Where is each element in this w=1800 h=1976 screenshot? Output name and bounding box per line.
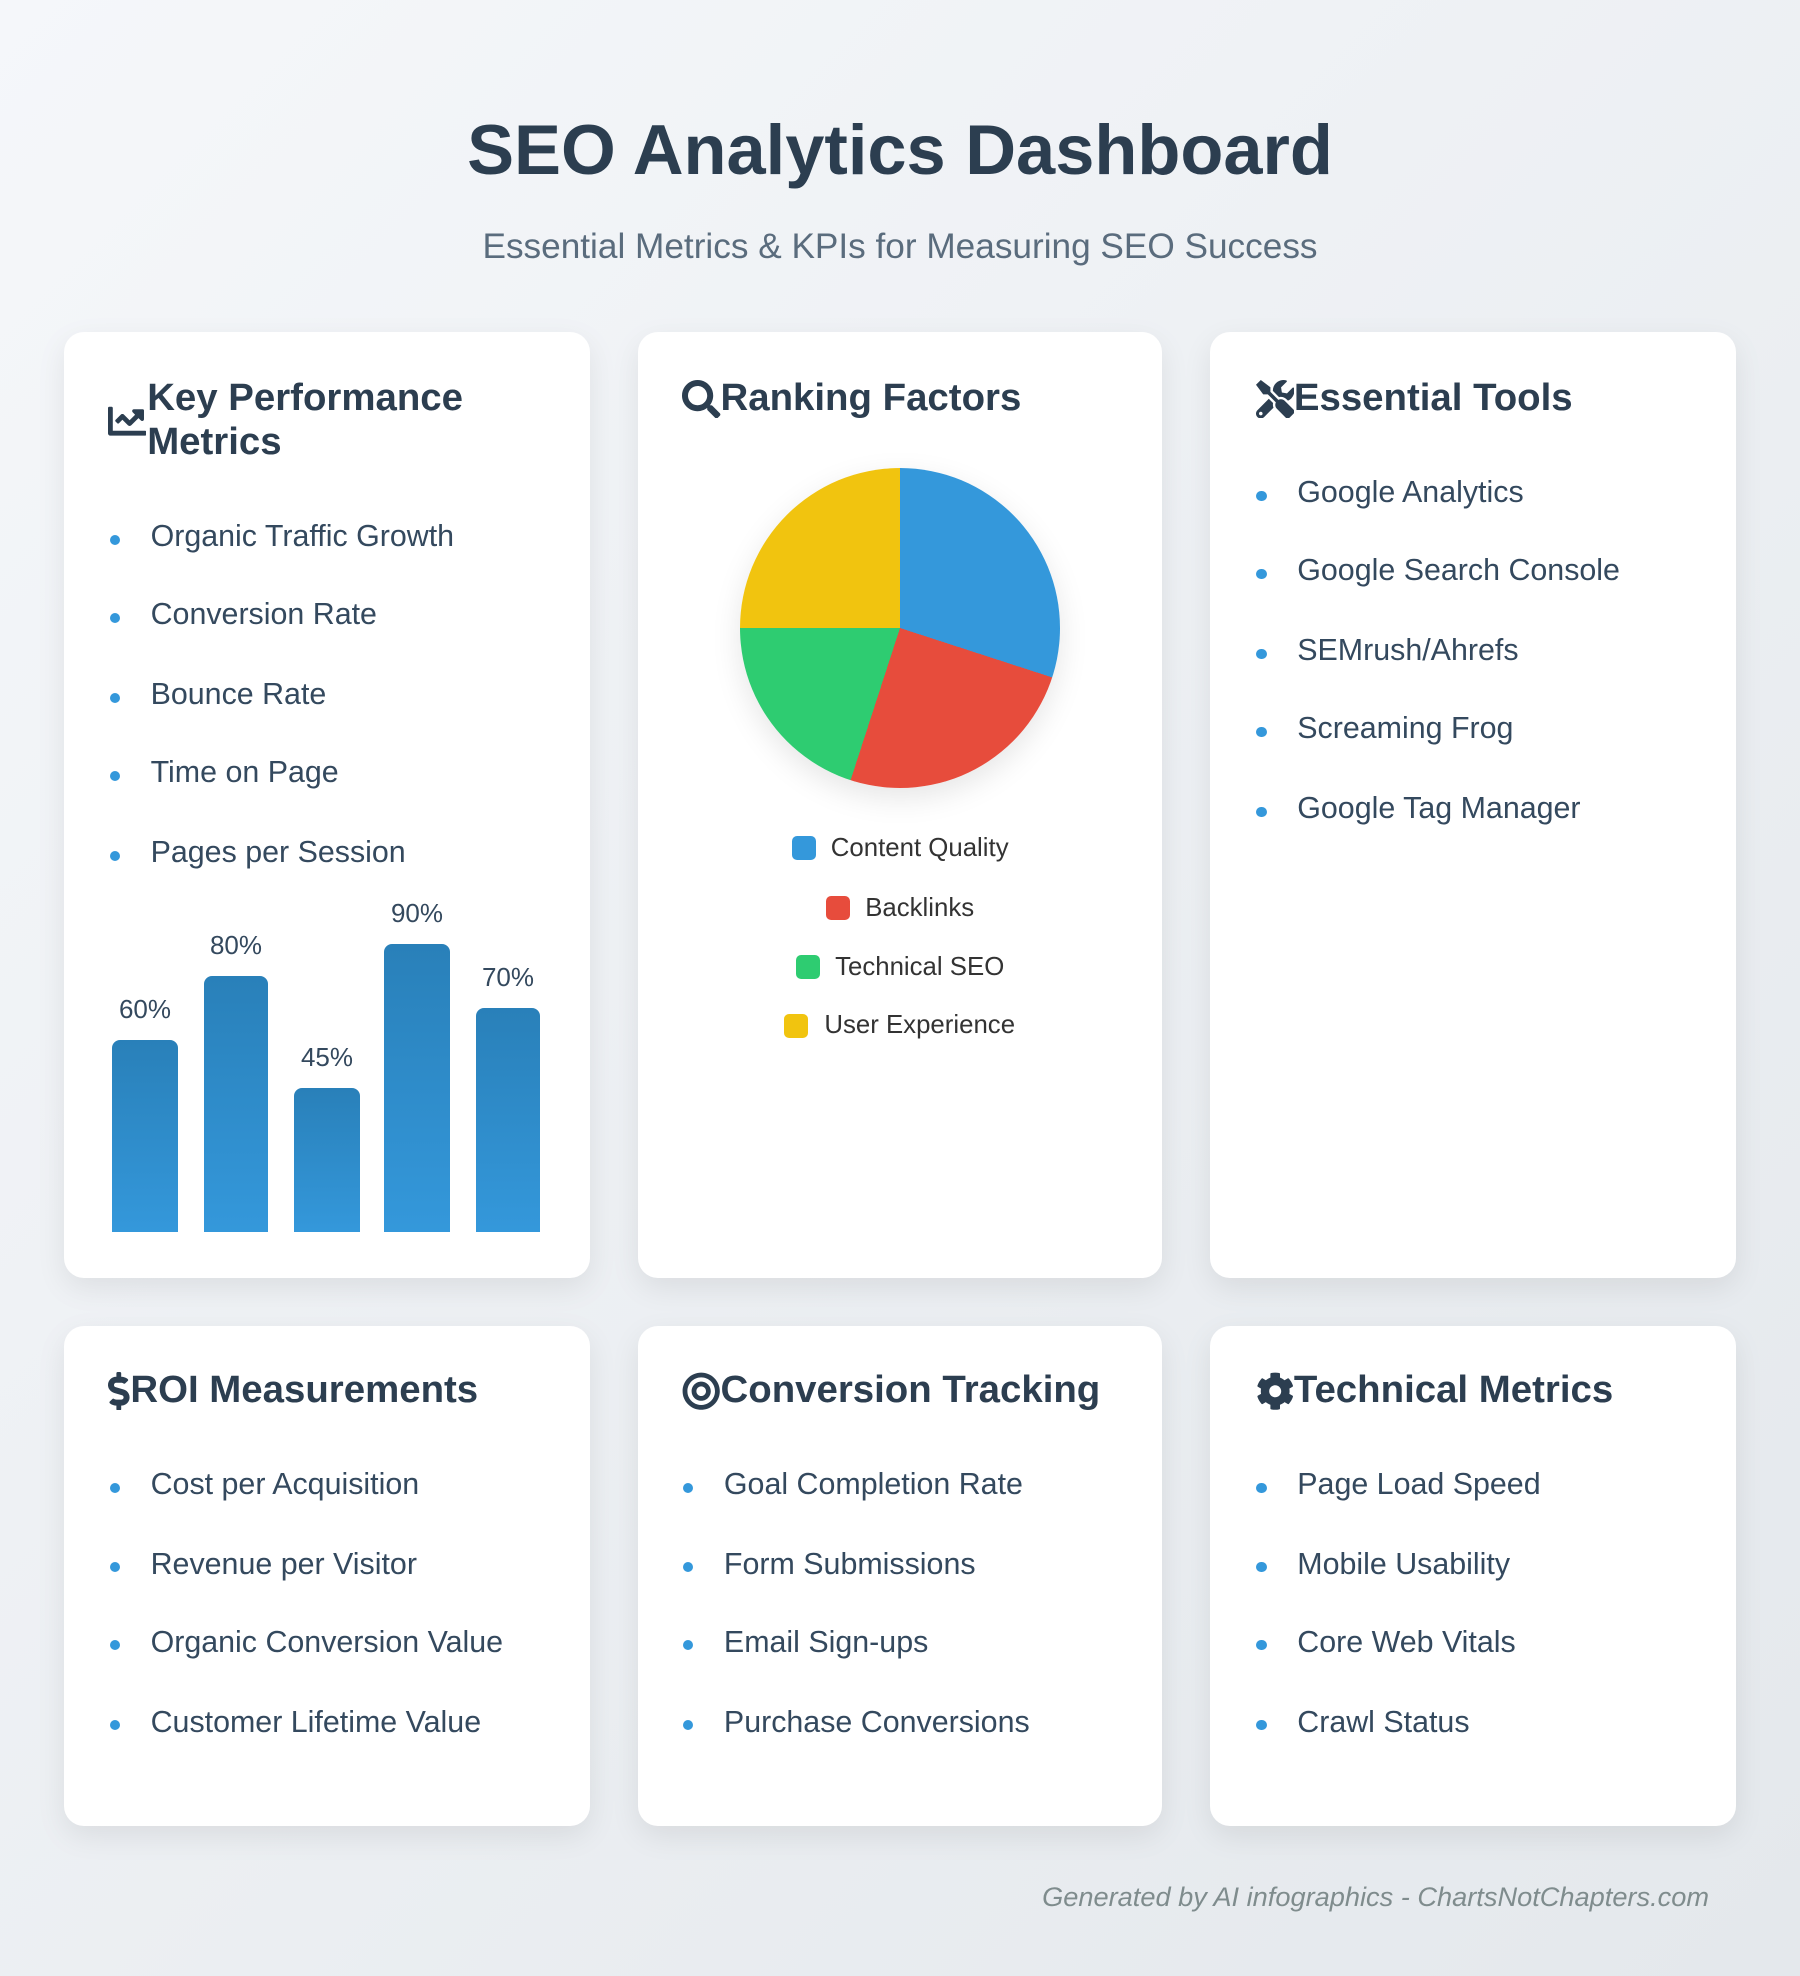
list: conversion items: Goal Completion Rate <box>724 1467 1023 1501</box>
heading: key performance metrics <box>108 376 463 463</box>
subtitle: Essential Metrics & KPIs for Measuring SEO Success <box>482 227 1318 266</box>
panel: essential tools <box>1210 332 1736 1278</box>
list: tools: Screaming Frog <box>1297 711 1513 745</box>
bar: 60% <box>112 994 178 1232</box>
title: SEO Analytics Dashboard <box>467 110 1333 189</box>
bar: 45% <box>294 1042 360 1232</box>
list: KPI items: Time on Page <box>151 755 339 789</box>
icon: line chart <box>108 406 146 436</box>
heading: essential tools: Essential Tools <box>1294 376 1573 419</box>
legend item: user experience: User Experience <box>824 1011 1015 1039</box>
list: technical items: Page Load Speed <box>1297 1467 1541 1501</box>
panel: key performance metrics <box>64 332 590 1278</box>
list: KPI items: Bounce Rate <box>151 677 326 711</box>
bar: 45%: 45% <box>301 1042 353 1072</box>
list: technical items: Core Web Vitals <box>1297 1625 1516 1659</box>
list: KPI items: Pages per Session <box>151 835 406 869</box>
icon: magnifying glass <box>682 380 720 418</box>
list: ROI items <box>110 1467 503 1739</box>
list: KPI items: Organic Traffic Growth <box>151 519 454 553</box>
heading: key performance metrics: Key Performance <box>147 376 463 419</box>
legend item: technical SEO: Technical SEO <box>835 953 1004 981</box>
footer credit: Generated by AI infographics - ChartsNotChapters.com <box>1042 1881 1709 1912</box>
bar: 70%: 70% <box>482 962 534 992</box>
list: KPI items: Conversion Rate <box>151 597 377 631</box>
bar: 80% <box>204 930 268 1232</box>
list: tools: SEMrush/Ahrefs <box>1297 633 1519 667</box>
list: ROI items: Revenue per Visitor <box>151 1547 417 1581</box>
panel: conversion tracking <box>638 1326 1162 1826</box>
bar: 90% <box>384 898 450 1232</box>
icon: tools <box>1256 380 1294 418</box>
list: KPI items <box>110 519 454 869</box>
bar chart <box>112 898 540 1232</box>
legend <box>784 834 1015 1039</box>
heading: conversion tracking: Conversion Tracking <box>721 1368 1100 1411</box>
legend item: backlinks: Backlinks <box>865 894 974 922</box>
list: conversion items: Email Sign-ups <box>724 1625 928 1659</box>
list: ROI items: Organic Conversion Value <box>151 1625 503 1659</box>
pie chart <box>740 468 1060 788</box>
list: tools: Google Analytics <box>1297 475 1524 509</box>
panel: technical metrics <box>1210 1326 1736 1826</box>
list: ROI items: Cost per Acquisition <box>151 1467 419 1501</box>
list: technical items <box>1256 1467 1541 1739</box>
heading: technical metrics: Technical Metrics <box>1294 1368 1613 1411</box>
list: conversion items: Purchase Conversions <box>724 1705 1030 1739</box>
bar: 90%: 90% <box>391 898 443 928</box>
list: tools: Google Tag Manager <box>1297 791 1581 825</box>
list: conversion items <box>683 1467 1030 1739</box>
bar: 60%: 60% <box>119 994 171 1024</box>
bar: 80%: 80% <box>210 930 262 960</box>
panel: ROI measurements <box>64 1326 590 1826</box>
heading: key performance metrics: Metrics <box>147 420 282 463</box>
heading: ROI measurements: ROI Measurements <box>130 1368 478 1411</box>
list: conversion items: Form Submissions <box>724 1547 976 1581</box>
bar: 70% <box>476 962 540 1232</box>
heading: ranking factors: Ranking Factors <box>721 376 1021 419</box>
list: tools: Google Search Console <box>1297 553 1620 587</box>
legend item: content quality: Content Quality <box>831 834 1009 862</box>
panel: ranking factors <box>638 332 1162 1278</box>
list: tools <box>1256 475 1620 825</box>
list: technical items: Crawl Status <box>1297 1705 1470 1739</box>
icon: bullseye <box>682 1372 720 1410</box>
icon: dollar sign <box>108 1372 130 1410</box>
list: technical items: Mobile Usability <box>1297 1547 1510 1581</box>
icon: gear <box>1257 1372 1293 1410</box>
list: ROI items: Customer Lifetime Value <box>151 1705 481 1739</box>
